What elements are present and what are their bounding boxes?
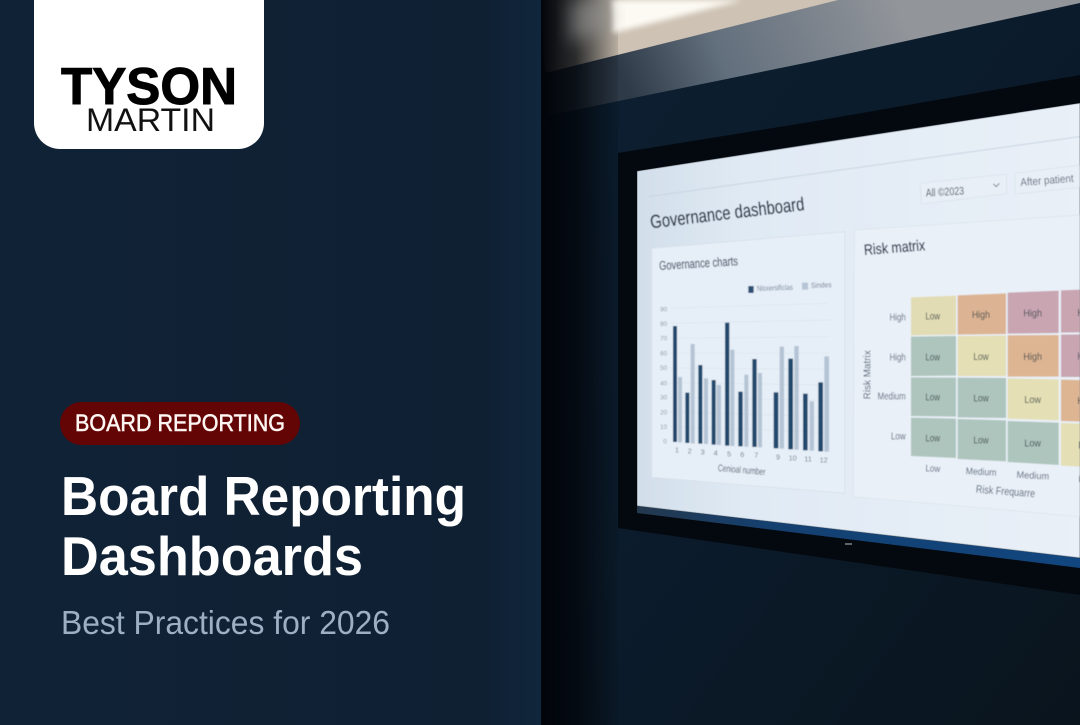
y axis labels: 30 [660, 395, 668, 402]
y axis labels: 60 [660, 350, 668, 357]
logo card [34, 0, 264, 149]
risk cell labels: Low [1024, 395, 1041, 406]
risk column labels: Low [925, 463, 940, 475]
risk cell labels: Low [1024, 438, 1041, 449]
x axis labels: 12 [820, 456, 828, 465]
x axis labels: 11 [804, 455, 812, 464]
risk cell labels: Low [925, 352, 940, 363]
y axis labels: 70 [660, 336, 668, 343]
left shadow on wall [541, 0, 618, 725]
header divider [648, 137, 1080, 197]
dashboard title: Governance dashboard [649, 193, 805, 232]
filter dropdown: year: All ©2023 [925, 185, 964, 200]
monitor blue lower edge [637, 506, 1080, 568]
y axis labels: 80 [660, 321, 668, 328]
ceiling light highlight [612, 0, 743, 33]
risk column labels [926, 464, 1080, 482]
x axis labels [675, 447, 828, 463]
dashboard screen [637, 103, 1080, 558]
risk row labels: High [890, 313, 906, 324]
y axis labels: 40 [660, 380, 668, 387]
risk matrix heading: Risk matrix [863, 237, 926, 259]
bar chart: dark series [673, 323, 823, 451]
panel: risk matrix [853, 215, 1080, 517]
risk cell labels: Low [925, 433, 940, 444]
ceiling left glow [570, 0, 612, 42]
risk axis title: Risk Matrix [862, 350, 873, 399]
risk column labels: Medium [966, 466, 997, 479]
y axis labels: 50 [660, 365, 668, 372]
monitor frame [618, 75, 1080, 595]
risk row labels: Medium [878, 392, 906, 403]
title [61, 465, 466, 587]
y axis labels: 90 [660, 306, 668, 313]
x axis labels: 4 [714, 448, 718, 457]
risk row labels: High [890, 352, 906, 363]
risk cell labels [925, 308, 1080, 452]
risk x axis title: Risk Frequarre [975, 484, 1036, 500]
risk cell labels: High [1023, 352, 1042, 363]
filter dropdown: patient: After patient [1020, 173, 1074, 189]
risk cell labels: Low [973, 352, 989, 363]
x axis labels: 1 [675, 445, 679, 454]
logo word: Tyson: TYSON [61, 58, 237, 116]
title: Dashboards [61, 525, 363, 587]
x axis title: Cenioal number [717, 463, 766, 478]
risk row labels: Low [891, 431, 906, 442]
grid lines [670, 303, 830, 433]
ceiling [540, 0, 1080, 116]
panel: governance charts [652, 243, 832, 482]
risk cell labels: Low [973, 394, 989, 405]
x axis labels: 2 [688, 447, 692, 456]
x axis labels: 5 [727, 449, 731, 458]
subtitle: Best Practices for 2026 [61, 604, 390, 641]
wall background [540, 0, 1080, 725]
chart legend [748, 280, 832, 293]
x axis labels: 7 [754, 451, 758, 460]
category badge: BOARD REPORTING [75, 410, 285, 437]
filter dropdown: patient [1015, 165, 1080, 194]
y axis labels: 0 [663, 439, 667, 446]
logo word: Martin: MARTIN [86, 102, 215, 138]
chart heading: Governance charts [659, 254, 738, 273]
risk cell labels: High [1023, 308, 1042, 319]
x axis labels: 9 [776, 453, 780, 462]
panel: left navy background [0, 0, 541, 725]
category badge [60, 402, 300, 445]
y axis labels: 10 [660, 424, 668, 431]
x axis labels: 10 [789, 454, 797, 463]
brand mark on bezel [845, 543, 852, 545]
x axis labels: 3 [701, 448, 705, 457]
y axis labels: 20 [660, 409, 668, 416]
risk cell labels: High [972, 310, 990, 321]
x axis labels: 6 [740, 450, 744, 459]
filter dropdown: year [926, 174, 1006, 197]
risk cell labels: Low [973, 436, 989, 447]
risk cell labels: Low [925, 312, 940, 323]
risk cell labels: Low [925, 393, 940, 404]
photo: boardroom wall with dashboard screen [540, 0, 1080, 725]
chart legend: Sindes [811, 280, 832, 290]
risk column labels: Medium [1016, 470, 1049, 483]
risk grid cells [911, 290, 1080, 467]
bar chart: light series [678, 344, 829, 452]
risk row labels [878, 313, 906, 442]
y axis labels [660, 306, 668, 446]
title: Board Reporting [61, 465, 466, 527]
chart legend: Nisxersificlas [757, 283, 793, 293]
